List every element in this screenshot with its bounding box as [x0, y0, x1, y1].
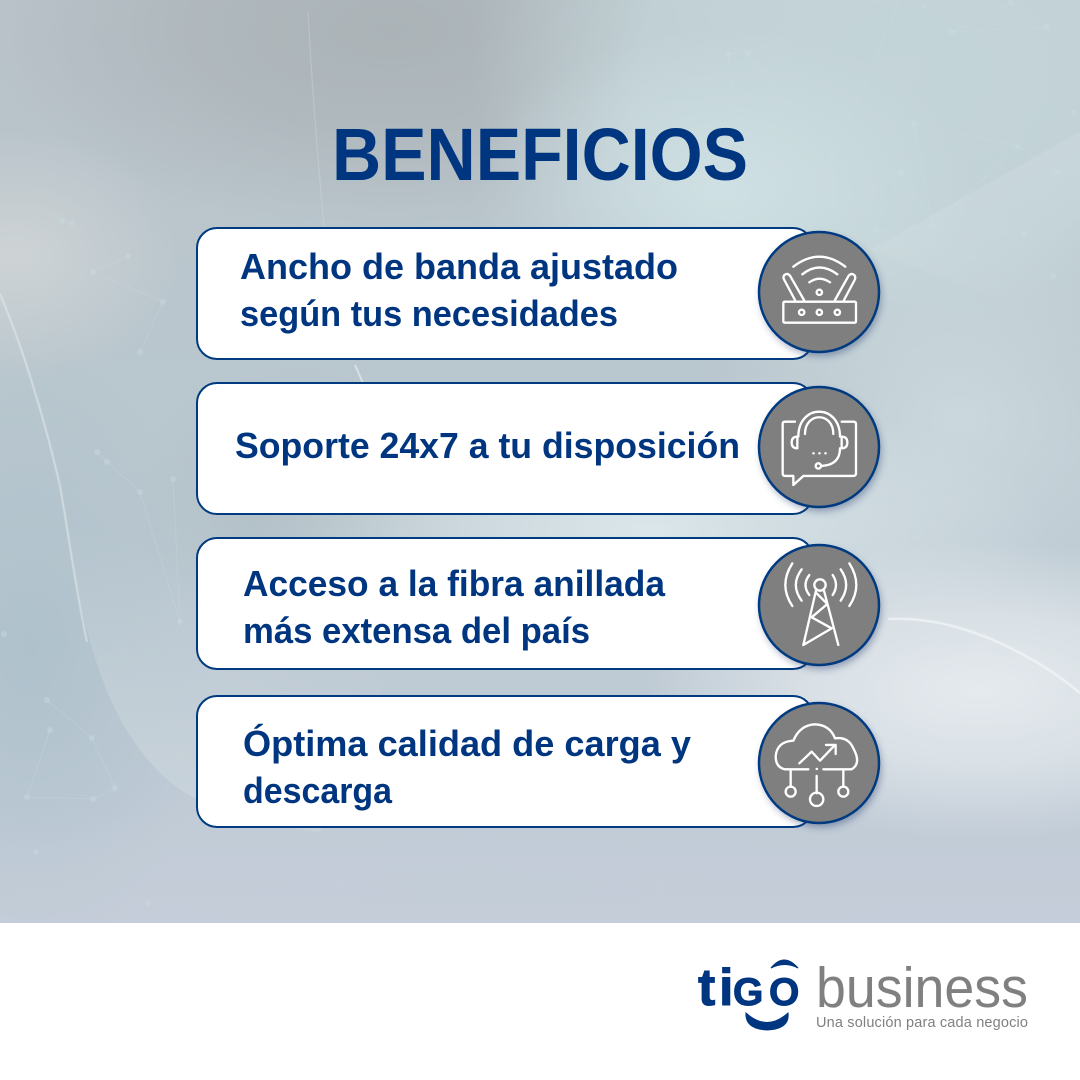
text: calidad: descarga	[243, 770, 393, 811]
text: ancho de banda: según tus necesidades	[240, 293, 618, 334]
logo: tigo wordmark: O	[769, 971, 799, 1014]
logo: tigo wordmark: i	[719, 959, 733, 1017]
text: fibra: más extensa del país	[243, 610, 590, 651]
icon: router	[759, 232, 881, 356]
text: fibra: Acceso a la fibra anillada	[243, 563, 666, 604]
text: fibra	[243, 563, 666, 651]
icon: antenna tower	[759, 545, 881, 669]
text: soporte: Soporte 24x7 a tu disposición	[235, 425, 740, 466]
panel: calidad	[197, 696, 813, 827]
text: calidad	[243, 722, 691, 811]
icon: headset support	[759, 387, 881, 511]
logo: tagline: Una solución para cada negocio	[816, 1015, 1028, 1031]
text: ancho de banda: Ancho de banda ajustado	[240, 246, 678, 287]
icon: cloud network	[759, 703, 881, 827]
title: BENEFICIOS	[332, 113, 748, 196]
logo: tigo wordmark	[698, 959, 799, 1030]
logo: tigo business	[698, 956, 1028, 1031]
logo: tigo wordmark: G	[733, 971, 763, 1014]
panel: ancho de banda	[197, 228, 813, 359]
logo: tigo wordmark: t	[698, 959, 715, 1017]
panel: soporte	[197, 383, 813, 514]
text: calidad: Óptima calidad de carga y	[243, 722, 691, 764]
logo: business wordmark: business	[816, 956, 1028, 1020]
panel: fibra	[197, 538, 813, 669]
text: ancho de banda	[240, 246, 678, 334]
footer band	[0, 923, 1080, 1080]
